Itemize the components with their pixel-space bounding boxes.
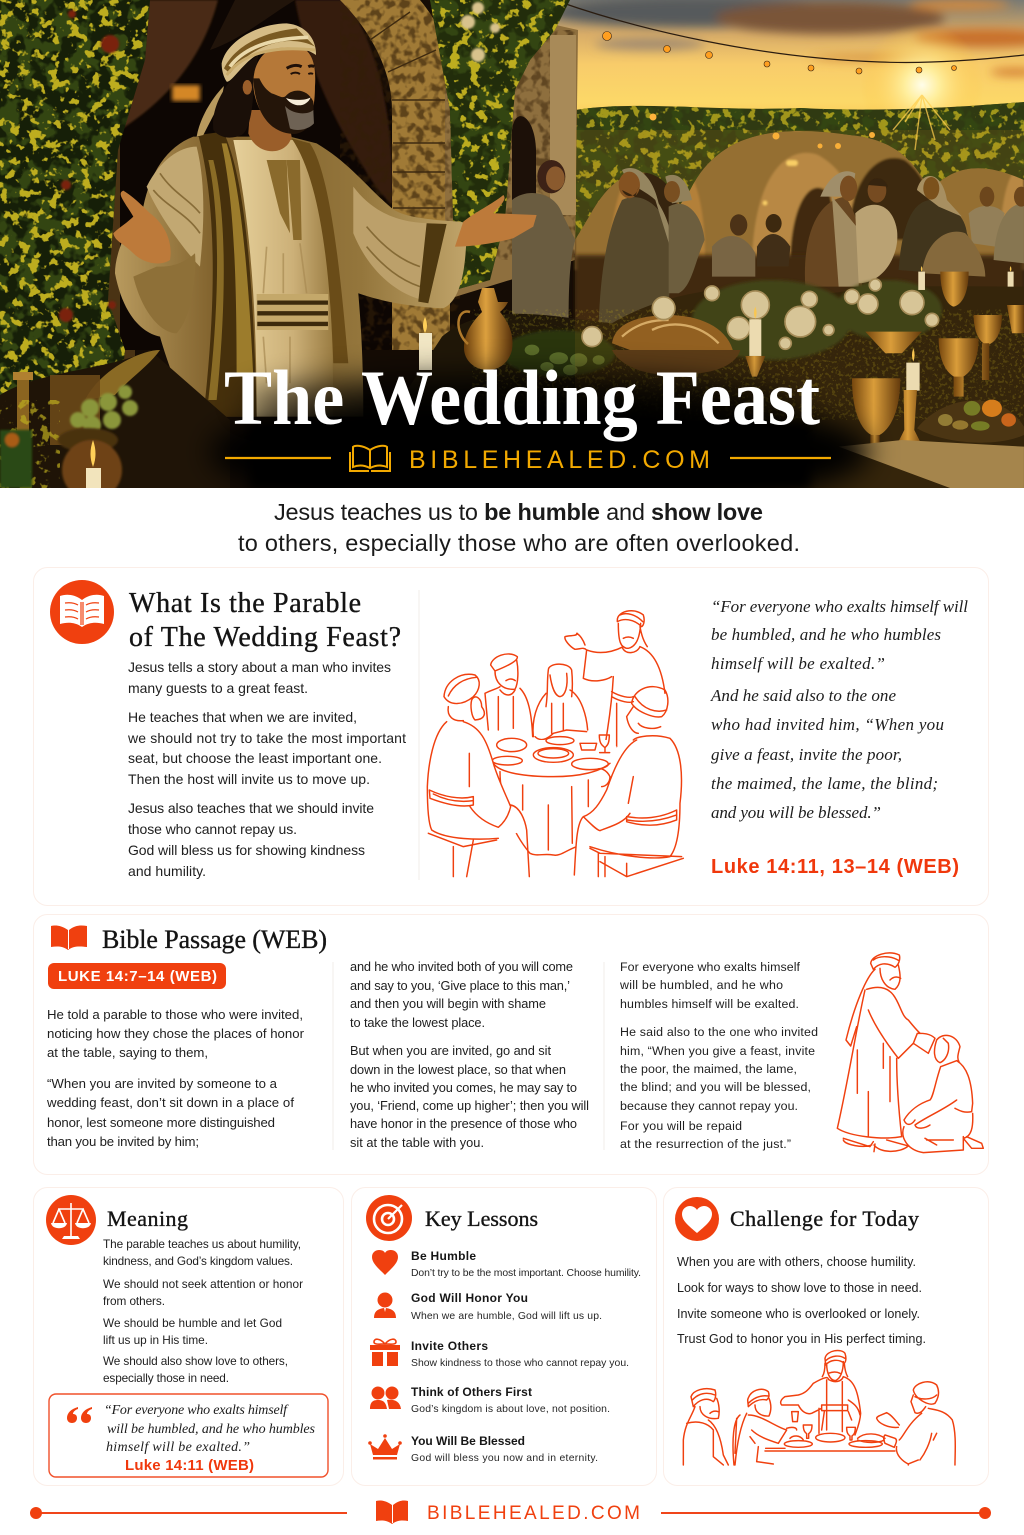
passage column 1: wedding feast, don’t sit down in a place of: [46, 1095, 294, 1110]
body text: especially those in need.: [103, 1371, 229, 1385]
lesson: god will honor you: When we are humble, God will lift us up.: [411, 1311, 602, 1322]
badge: passage reference: [48, 963, 226, 989]
heading: Challenge for Today: [730, 1206, 919, 1231]
heading: Meaning: [107, 1206, 188, 1231]
line drawing: host and guests at table: [683, 1351, 955, 1465]
passage column 3: [619, 960, 818, 1151]
lesson: god will honor you: [374, 1291, 602, 1322]
site name and book icon: BIBLEHEALED.COM: [409, 446, 710, 474]
passage column 1: “When you are invited by someone to a: [47, 1076, 278, 1091]
scripture quote: [710, 597, 968, 822]
callout: quote box: Luke 14:11 (WEB): [125, 1457, 254, 1474]
heading: of The Wedding Feast?: [129, 622, 401, 653]
body text: Then the host will invite us to move up.: [128, 771, 370, 787]
passage column 3: humbles himself will be exalted.: [620, 997, 799, 1011]
passage column 1: [46, 1007, 305, 1149]
passage column 3: him, “When you give a feast, invite: [620, 1044, 815, 1058]
body text: seat, but choose the least important one.: [128, 750, 382, 766]
body text: Jesus also teaches that we should invite: [128, 800, 374, 816]
passage column 3: For you will be repaid: [620, 1119, 742, 1133]
icon: filled book: [51, 925, 87, 950]
passage column 3: the poor, the maimed, the lame,: [620, 1062, 797, 1076]
icon: open book in circle: [50, 580, 114, 644]
line drawing: guests around a table: [427, 611, 683, 877]
passage column 2: But when you are invited, go and sit: [350, 1043, 551, 1058]
warm evening light over the courtyard: [575, 130, 1024, 488]
lesson: you will be blessed: [368, 1434, 598, 1464]
passage column 2: he who invited you comes, he may say to: [350, 1080, 577, 1095]
passage column 2: have honor in the presence of those who: [350, 1116, 577, 1131]
tagline: to others, especially those who are often overlooked.: [238, 530, 800, 556]
distant courtyard wall with arches: [575, 130, 1024, 270]
body text: we should not try to take the most important: [127, 730, 406, 746]
body text: God will bless us for showing kindness: [128, 842, 365, 858]
icon: quotation mark: [67, 1407, 92, 1423]
lesson: invite others: Invite Others: [411, 1339, 488, 1353]
lesson: you will be blessed: You Will Be Blessed: [411, 1434, 525, 1448]
passage column 3: For everyone who exalts himself: [620, 960, 801, 974]
site name and book icon: [225, 446, 831, 474]
body text: many guests to a great feast.: [128, 680, 308, 696]
body text: The parable teaches us about humility,: [103, 1237, 301, 1251]
lesson: be humble: [372, 1249, 641, 1279]
passage column 2: and say to you, ‘Give place to this man,’: [350, 978, 570, 993]
passage column 1: at the table, saying to them,: [47, 1045, 208, 1060]
passage column 1: than you be invited by him;: [47, 1134, 199, 1149]
tagline: [238, 499, 800, 556]
body text: We should also show love to others,: [103, 1354, 288, 1368]
body text: [677, 1255, 926, 1346]
passage column 1: honor, lest someone more distinguished: [47, 1115, 275, 1130]
icon: target in circle: [366, 1195, 412, 1241]
body text: We should be humble and let God: [103, 1316, 282, 1330]
dark gradient behind title: [210, 370, 870, 514]
passage column 1: noticing how they chose the places of honor: [47, 1026, 305, 1041]
passage column 3: He said also to the one who invited: [620, 1025, 818, 1039]
string of lights: [560, 2, 1024, 74]
scripture quote: the maimed, the lame, the blind;: [711, 774, 938, 793]
body text: [103, 1237, 303, 1385]
passage column 2: and then you will begin with shame: [350, 996, 546, 1011]
line drawing: host blessing a kneeling man: [837, 953, 983, 1153]
foreground left: grapes, candle and gold ornament: [0, 350, 230, 500]
lesson: think of others first: [370, 1385, 610, 1415]
body text: We should not seek attention or honor: [103, 1277, 303, 1291]
body text: He teaches that when we are invited,: [128, 709, 357, 725]
crowd of guests: [512, 160, 1024, 340]
heading: [129, 588, 401, 653]
scripture quote: and you will be blessed.”: [711, 803, 881, 822]
scripture quote: “For everyone who exalts himself will: [711, 597, 968, 616]
scripture quote: give a feast, invite the poor,: [711, 745, 902, 764]
callout: quote box: will be humbled, and he who humbles: [107, 1422, 316, 1437]
panel: what is the parable: [34, 568, 988, 906]
body text: Look for ways to show love to those in need.: [677, 1281, 922, 1295]
body text: from others.: [103, 1294, 165, 1308]
passage column 2: and he who invited both of you will come: [350, 959, 573, 974]
lesson: invite others: Show kindness to those who cannot repay you.: [411, 1358, 629, 1369]
scripture quote: who had invited him, “When you: [711, 715, 944, 734]
scripture quote: himself will be exalted.”: [711, 654, 885, 673]
body text: Invite someone who is overlooked or lonely.: [677, 1307, 920, 1321]
passage column 2: to take the lowest place.: [350, 1015, 485, 1030]
passage column 3: the blind; and you will be blessed,: [620, 1080, 811, 1094]
lesson: you will be blessed: God will bless you now and in eternity.: [411, 1453, 598, 1464]
callout: quote box: himself will be exalted.”: [106, 1440, 250, 1455]
panel: key lessons: [352, 1188, 656, 1486]
body text: When you are with others, choose humility.: [677, 1255, 916, 1269]
callout: quote box: “For everyone who exalts himself: [104, 1403, 289, 1418]
scripture quote: be humbled, and he who humbles: [711, 625, 941, 644]
scripture reference: Luke 14:11, 13–14 (WEB): [711, 856, 959, 878]
badge: passage reference: LUKE 14:7–14 (WEB): [58, 968, 217, 985]
body text: Jesus tells a story about a man who invites: [128, 659, 391, 675]
lesson: be humble: Be Humble: [411, 1249, 476, 1263]
lesson: think of others first: Think of Others First: [411, 1385, 532, 1399]
tree line with golden lights: [567, 95, 1024, 245]
sunset sky: [558, 0, 1024, 132]
icon: footer book: [376, 1500, 408, 1524]
body text: those who cannot repay us.: [128, 821, 297, 837]
scripture quote: And he said also to the one: [710, 686, 896, 705]
lesson: invite others: [370, 1339, 629, 1369]
lesson: think of others first: God’s kingdom is about love, not position.: [411, 1404, 610, 1415]
panel: bible passage: [34, 914, 988, 1174]
body text: kindness, and God’s kingdom values.: [103, 1254, 293, 1268]
callout: quote box: [49, 1394, 328, 1477]
heading: What Is the Parable: [129, 588, 361, 619]
tagline: Jesus teaches us to be humble and show love: [274, 499, 763, 525]
footer: [30, 1500, 991, 1524]
body text: Trust God to honor you in His perfect timing.: [677, 1332, 926, 1346]
heading: Key Lessons: [425, 1206, 538, 1231]
icon: heart in circle: [675, 1197, 719, 1241]
body text: and humility.: [128, 863, 206, 879]
passage column 3: because they cannot repay you.: [620, 1099, 798, 1113]
body text: lift us up in His time.: [103, 1333, 208, 1347]
panel: meaning: [34, 1188, 344, 1486]
footer site name: BIBLEHEALED.COM: [427, 1503, 640, 1524]
lesson: god will honor you: God Will Honor You: [411, 1291, 528, 1305]
title: The Wedding Feast: [224, 354, 820, 441]
panel: challenge for today: [664, 1188, 988, 1486]
hero illustration: wedding feast scene: [0, 0, 1024, 514]
standing host in robes: [113, 23, 537, 417]
passage column 2: [350, 959, 589, 1150]
passage column 3: at the resurrection of the just.”: [620, 1137, 791, 1151]
passage column 1: He told a parable to those who were invited,: [47, 1007, 303, 1022]
body text: [127, 659, 406, 879]
passage column 2: down in the lowest place, so that when: [350, 1062, 566, 1077]
heading: Bible Passage (WEB): [102, 925, 327, 954]
passage column 2: sit at the table with you.: [350, 1135, 484, 1150]
candle and jug behind title: [419, 288, 512, 370]
stone building, curtains and dark interior at left: [0, 0, 578, 400]
lesson: be humble: Don’t try to be the most important. Choose humility.: [411, 1268, 641, 1279]
banquet table with flowers, bread and goblets: [420, 266, 1024, 488]
icon: scales in circle: [46, 1195, 96, 1245]
passage column 2: you, ‘Friend, come up higher’; then you will: [350, 1098, 589, 1113]
passage column 3: will be humbled, and he who: [619, 978, 783, 992]
